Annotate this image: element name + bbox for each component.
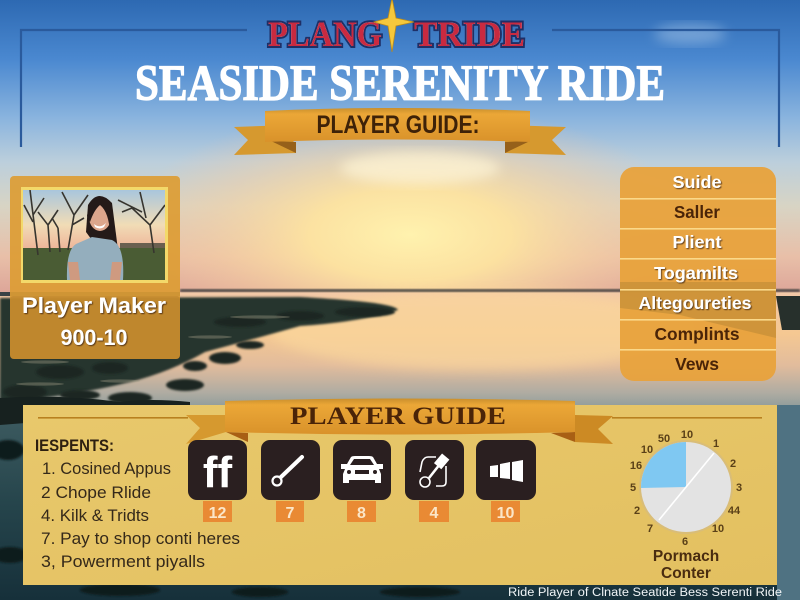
list: iespents: 4. Kilk & Tridts (41, 506, 149, 525)
panel: side menu: Vews (675, 354, 719, 374)
icon: ff (188, 440, 247, 522)
panel: side menu: Plient (672, 232, 722, 252)
icon: car (333, 440, 391, 522)
chart: pie dial: 44 (728, 505, 741, 517)
chart: pie dial: Conter (661, 565, 711, 582)
chart: pie dial: Pormach (653, 548, 719, 565)
panel: player card: Player Maker (22, 293, 166, 318)
icon: wrench: 7 (286, 505, 295, 522)
panel: side menu: Altegoureties (638, 293, 752, 313)
logo: Plang Tride (268, 0, 525, 54)
list: iespents: 2 Chope Rlide (41, 483, 151, 502)
icon: windows: 10 (497, 505, 514, 522)
panel: side menu: Complints (654, 324, 740, 344)
top ribbon: player guide: PLAYER GUIDE: (316, 111, 480, 139)
panel: side menu: Togamilts (654, 263, 738, 283)
panel: player card (10, 176, 180, 359)
chart: pie dial: 50 (658, 433, 670, 445)
person (86, 196, 118, 245)
chart: pie dial: 3 (736, 482, 742, 494)
icon: gold star (374, 0, 414, 52)
chart: pie dial (630, 429, 742, 582)
logo: Plang Tride: PLANG (268, 14, 382, 54)
chart: pie dial: 10 (681, 429, 693, 441)
icon: ff: 12 (209, 505, 226, 522)
top ribbon: player guide (234, 108, 566, 155)
icon: car: 8 (357, 505, 366, 522)
logo: Plang Tride: TRIDE (414, 14, 525, 54)
title: SEASIDE SERENITY RIDE (135, 56, 665, 112)
chart: pie dial: 6 (682, 536, 688, 548)
panel: side menu: Suide (672, 172, 722, 192)
top frame lines (21, 30, 779, 147)
footer caption: Ride Player of Clnate Seatide Bess Serenti Ride (508, 587, 782, 599)
chart: pie dial: 16 (630, 460, 642, 472)
list: iespents: 3, Powerment piyalls (41, 552, 205, 571)
icon: windows (476, 440, 536, 522)
chart: pie dial: 7 (647, 523, 653, 535)
rocks (3, 307, 395, 404)
icon: microphone (405, 440, 464, 522)
chart: pie dial: 5 (630, 482, 636, 494)
panel: side menu (620, 167, 776, 381)
logo: Plang Tride: TRIDE (414, 14, 525, 54)
icon: ff: ff (203, 448, 232, 497)
chart: pie dial: 10 (641, 444, 653, 456)
list: iespents: 7. Pay to shop conti heres (41, 529, 240, 548)
chart: pie dial: 1 (713, 438, 719, 450)
chart: pie dial: 2 (730, 458, 736, 470)
panel: bottom guide (23, 398, 777, 585)
list: iespents: IESPENTS: (35, 437, 114, 455)
player photo (21, 187, 168, 283)
bottom ribbon (186, 398, 613, 444)
chart: pie dial: 2 (634, 505, 640, 517)
list: iespents: 1. Cosined Appus (42, 459, 171, 478)
chart: pie dial: 10 (712, 523, 724, 535)
icon: microphone: 4 (430, 505, 439, 522)
logo: Plang Tride: PLANG (268, 14, 382, 54)
panel: side menu: Saller (674, 202, 720, 222)
icon: wrench (261, 440, 320, 522)
bottom ribbon: PLAYER GUIDE (290, 401, 506, 430)
list: iespents (35, 437, 240, 571)
panel: player card: 900-10 (60, 325, 128, 350)
